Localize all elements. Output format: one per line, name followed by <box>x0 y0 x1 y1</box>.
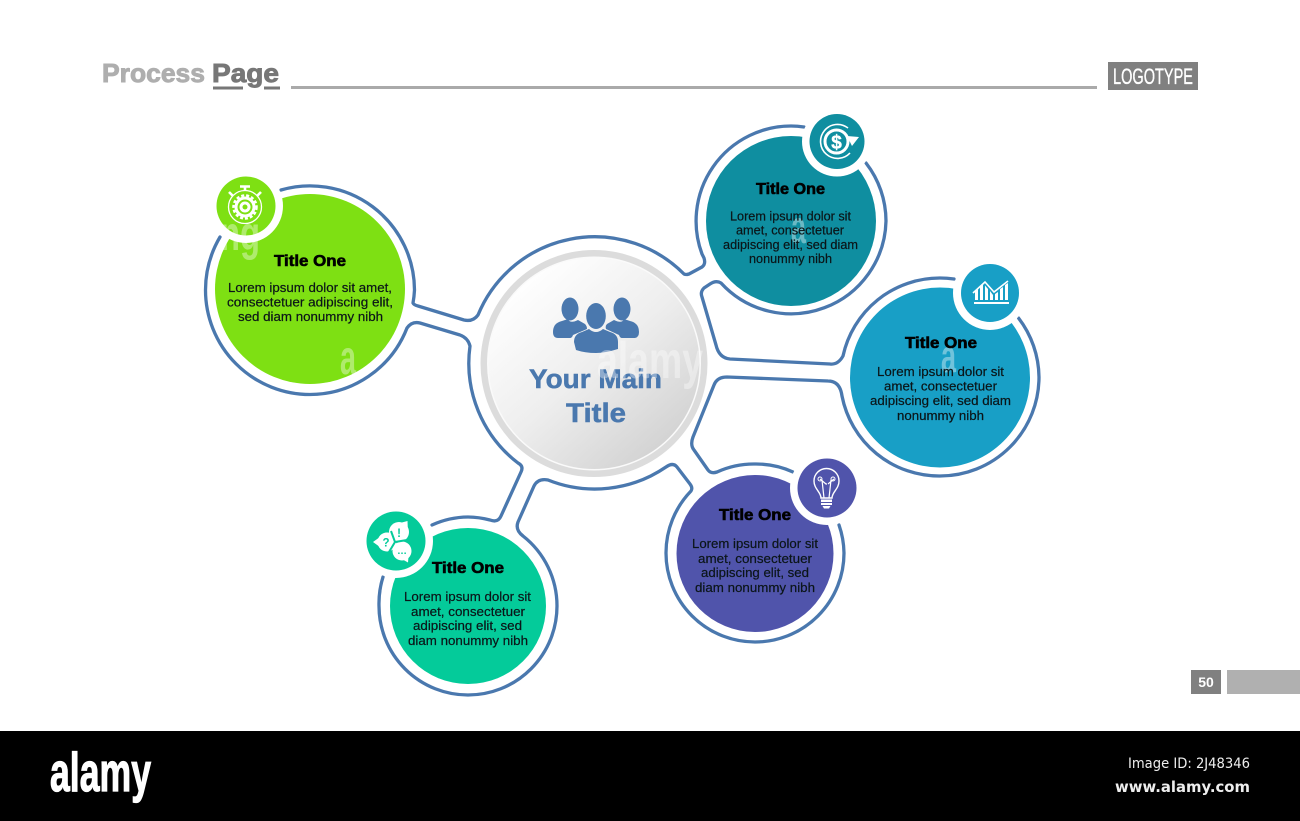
panel: blue circle <box>850 256 1030 468</box>
icon: speech bubbles: ... <box>398 546 407 557</box>
text: teal body: amet, consectetuer <box>736 224 844 238</box>
panel: green circle <box>209 169 405 385</box>
watermark over hub: alamy <box>597 332 703 390</box>
text: blue body: adipiscing elit, sed diam <box>870 394 1011 408</box>
text: teal title: Title One <box>756 181 825 198</box>
text: sea-green body: diam nonummy nibh <box>408 634 528 648</box>
heading: main title <box>529 364 662 428</box>
text: blue title: Title One <box>905 335 977 352</box>
panel: blue circle: a <box>941 330 956 382</box>
text: sea-green body: amet, consectetuer <box>411 605 525 619</box>
text: teal body: Lorem ipsum dolor sit <box>730 210 851 224</box>
panel: teal circle <box>706 106 876 306</box>
footer url: www.alamy.com <box>1115 778 1250 796</box>
panel: green circle: a <box>340 332 356 385</box>
text: purple body: diam nonummy nibh <box>695 581 815 595</box>
panel: central hub <box>480 250 708 477</box>
text: blue body: nonummy nibh <box>897 409 984 423</box>
footer image id: Image ID: 2J48346 <box>1128 756 1250 772</box>
text: purple body: adipiscing elit, sed <box>701 566 809 580</box>
connector outline network <box>206 126 1039 695</box>
panel: teal circle: a <box>791 201 806 253</box>
text: sea-green body: adipiscing elit, sed <box>413 619 522 633</box>
logotype <box>1108 62 1198 90</box>
panel: sea-green circle <box>359 504 546 684</box>
text: green title: Title One <box>274 253 346 270</box>
page number: 50 <box>1198 674 1214 690</box>
icon: people <box>553 298 639 353</box>
icon: speech bubbles <box>373 521 412 562</box>
text: blue body: Lorem ipsum dolor sit <box>877 365 1005 379</box>
icon: speech bubbles: ? <box>382 538 390 550</box>
header: title: Page <box>212 58 279 88</box>
footer band <box>0 731 1300 821</box>
text: green body: Lorem ipsum dolor sit amet, <box>228 281 392 295</box>
heading: main title: Title <box>566 398 626 428</box>
heading: main title: Your Main <box>529 364 662 394</box>
text: green body <box>227 281 393 324</box>
icon: bar and line chart <box>973 281 1009 304</box>
text: sea-green body <box>404 590 532 648</box>
text: teal body: nonummy nibh <box>749 252 832 266</box>
text: purple body: amet, consectetuer <box>698 552 812 566</box>
icon: light bulb <box>814 468 839 508</box>
text: green body: sed diam nonummy nibh <box>238 310 383 324</box>
text: purple body: Lorem ipsum dolor sit <box>692 537 819 551</box>
text: sea-green body: Lorem ipsum dolor sit <box>404 590 532 604</box>
icon: dollar cycle: $ <box>831 132 842 154</box>
text: teal body: adipiscing elit, sed diam <box>723 238 858 252</box>
text: green body: consectetuer adipiscing elit, <box>227 296 393 310</box>
page number <box>1191 670 1221 694</box>
panel: purple circle: a <box>796 463 811 515</box>
text: blue body <box>870 365 1011 423</box>
panel: purple circle <box>676 451 864 632</box>
header: title: Process <box>102 58 205 88</box>
footer logo: alamy <box>50 741 151 803</box>
icon: stopwatch gear <box>228 186 262 224</box>
text: teal body <box>723 210 858 266</box>
logotype: LOGOTYPE <box>1113 64 1193 89</box>
text: purple title: Title One <box>719 507 791 524</box>
icon: dollar cycle <box>821 124 859 158</box>
icon: speech bubbles: ! <box>397 528 401 540</box>
header: title <box>102 58 280 90</box>
panel: green circle: ng <box>220 208 260 261</box>
text: sea-green title: Title One <box>432 560 504 577</box>
text: purple body <box>692 537 819 595</box>
text: blue body: amet, consectetuer <box>884 380 997 394</box>
